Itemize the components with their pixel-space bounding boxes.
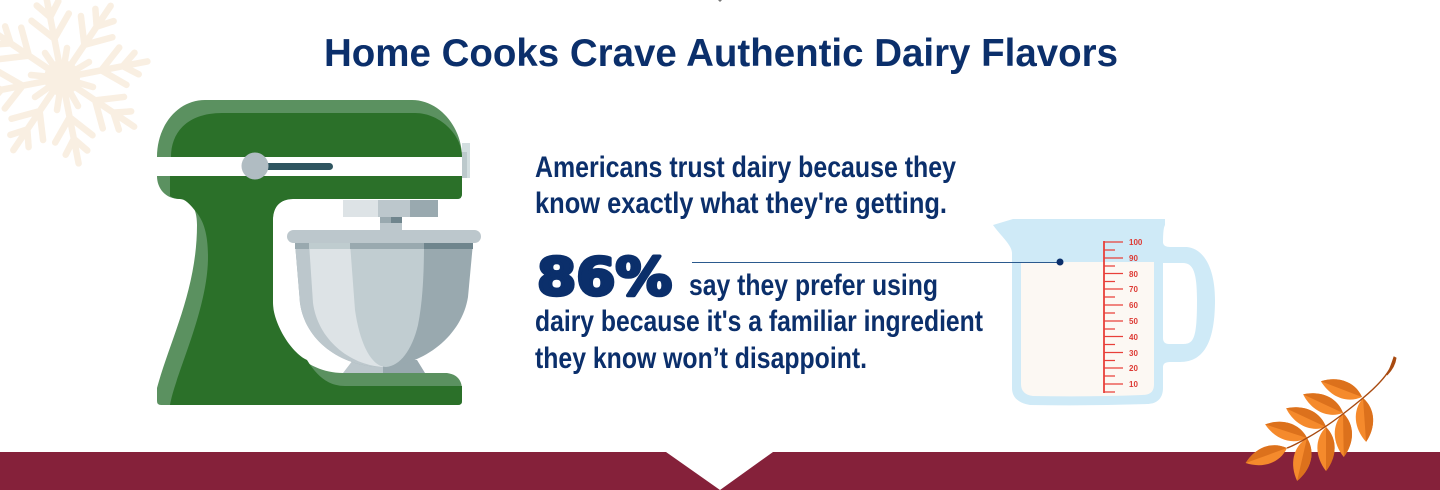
- bowl rim: [287, 230, 481, 243]
- bowl: [295, 243, 473, 367]
- text: stat description: say they prefer using: [689, 269, 938, 302]
- mixer body highlight: [157, 100, 462, 405]
- title: Home Cooks Crave Authentic Dairy Flavors: [324, 32, 1118, 75]
- scale: 60: [1129, 301, 1138, 310]
- scale: 100: [1129, 238, 1143, 247]
- scale: 90: [1129, 254, 1138, 263]
- stat: 86%: 86%: [537, 248, 672, 308]
- top marker: [718, 0, 722, 2]
- scale: 80: [1129, 270, 1138, 279]
- scale: 30: [1129, 349, 1138, 358]
- text: trust statement: know exactly what they're getting.: [535, 187, 947, 220]
- icon: autumn leaf branch: [1243, 357, 1396, 483]
- attachment block: [343, 200, 438, 231]
- scale: 70: [1129, 285, 1138, 294]
- bowl foot: [343, 360, 383, 373]
- callout line: [692, 258, 1064, 266]
- text: stat description: [535, 269, 983, 375]
- scale: 20: [1129, 364, 1138, 373]
- knob: [242, 152, 268, 180]
- white band: [157, 157, 462, 176]
- text: stat description: dairy because it's a familiar ingredient: [535, 305, 983, 338]
- icon: measuring jug: [993, 219, 1215, 405]
- mixer body: [170, 113, 462, 405]
- text: trust statement: Americans trust dairy because they: [535, 151, 956, 184]
- milk: [1021, 262, 1154, 396]
- lever: [262, 163, 333, 170]
- scale: 50: [1129, 317, 1138, 326]
- text: stat description: they know won’t disappoint.: [535, 342, 867, 375]
- scale: 10: [1129, 380, 1138, 389]
- scale: [1104, 238, 1143, 393]
- snowflake: [0, 0, 151, 167]
- text: trust statement: [535, 151, 956, 220]
- icon: stand mixer: [157, 100, 481, 405]
- scale: 40: [1129, 333, 1138, 342]
- footer band: [0, 452, 1440, 490]
- jug body: [993, 219, 1215, 405]
- rear tab: [462, 143, 470, 178]
